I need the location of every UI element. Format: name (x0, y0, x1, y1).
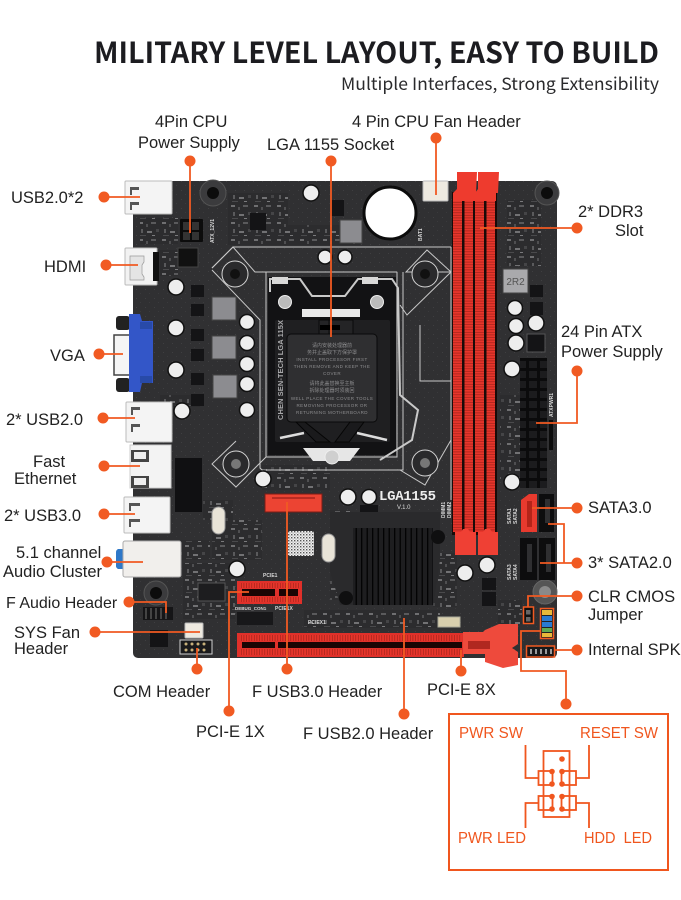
board silkscreen labels: SATA3 (507, 564, 513, 580)
leader: internal SPK (555, 644, 582, 656)
internal speaker header (526, 646, 554, 657)
label: HDMI: HDMI (44, 258, 86, 276)
label: 2* DDR3 Slot: 2* DDR3 (578, 203, 643, 221)
leader: F audio header (124, 596, 166, 613)
PCI-E 8X slot (237, 624, 518, 668)
large PHY chip (175, 458, 202, 512)
cover text: 请将此盖替换至主板 (309, 380, 355, 387)
F audio header (143, 607, 173, 620)
leader: audio cluster (102, 556, 143, 568)
leader: CPU power (184, 156, 196, 233)
board silkscreen labels: DEBUG_CON1 (235, 606, 267, 611)
PCI-E 1X slot (237, 581, 302, 604)
cover text: 务并止盖取下方保护罩 (307, 349, 357, 356)
board silkscreen labels: SATA1 (507, 508, 513, 524)
VGA port (114, 314, 153, 392)
CPU mounting holes (222, 261, 438, 477)
protective cover (287, 334, 377, 422)
leader: PCI-E 8X (456, 650, 466, 676)
label: CLR CMOS Jumper: CLR CMOS (588, 588, 675, 606)
cover text: 请内安装处理器前 (312, 342, 352, 349)
SATA2.0 connectors (520, 494, 555, 580)
PCI-E latch (463, 624, 518, 668)
CMOS battery (364, 187, 416, 239)
front panel header (540, 608, 554, 638)
leader: DDR3 (480, 222, 582, 234)
leader: front panel to pinout (521, 631, 572, 710)
leader: Ethernet (98, 460, 140, 472)
F USB3.0 header (265, 494, 322, 512)
subtitle: Multiple Interfaces, Strong Extensibility (341, 70, 659, 95)
label: F USB3.0 Header: F USB3.0 Header (252, 683, 383, 701)
label: SATA3.0: SATA3.0 (588, 499, 652, 517)
COM header (180, 640, 212, 654)
leader: COM header (192, 648, 202, 674)
label: PWR SW: PWR SW (459, 725, 524, 742)
board silkscreen labels: ATX_12V1 (210, 219, 216, 243)
audio cluster (116, 541, 181, 577)
label: 2* USB3.0: 2* USB3.0 (4, 507, 81, 525)
leader: SYS fan header (90, 626, 200, 638)
label: Internal SPK: Internal SPK (588, 641, 681, 659)
board silkscreen labels: PCIE1 (263, 573, 278, 579)
DIMM2 rails (475, 196, 484, 532)
leader: ATX power (536, 366, 582, 423)
label: PCI-E 8X: PCI-E 8X (427, 681, 496, 699)
DDR3 slots (452, 172, 499, 555)
DDR3 bottom latches (455, 529, 476, 555)
USB 2.0 rear port (126, 402, 172, 442)
leader: SATA3.0 (532, 502, 582, 514)
label: SYS Fan Header: Header (14, 640, 69, 658)
CLR CMOS jumper (524, 607, 534, 624)
DDR3 top latches (453, 172, 477, 201)
leader: F USB2.0 header (398, 618, 410, 720)
cover text: RETURNING MOTHERBOARD (296, 410, 368, 415)
label: 2* USB2.0: 2* USB2.0 (6, 411, 83, 429)
Ethernet port (130, 445, 171, 488)
leader: rear USB2.0 (98, 412, 135, 424)
socket screws (278, 296, 292, 308)
label: PCI-E 1X: PCI-E 1X (196, 723, 265, 741)
leader: SATA2.0 (540, 524, 582, 568)
label: Fast Ethernet: Fast (33, 453, 65, 471)
leader: CLR CMOS (528, 590, 582, 607)
label: VGA: VGA (50, 347, 85, 365)
load plate (275, 320, 390, 442)
inductors (212, 220, 362, 398)
board silkscreen labels: DIMM1 (441, 502, 447, 518)
CPU area silkscreen outline (212, 247, 451, 500)
board silkscreen labels: PCIE1X (275, 606, 293, 612)
label: 4Pin CPU Power Supply: 4Pin CPU (155, 113, 227, 131)
leader: USB2.0*2 (98, 192, 140, 202)
cover text (291, 342, 373, 415)
cover text: COVER (323, 371, 341, 376)
label: CLR CMOS Jumper: Jumper (588, 606, 644, 624)
socket body (268, 277, 396, 455)
board silkscreen labels: ATXPWR1 (549, 393, 555, 417)
label: COM Header: COM Header (113, 683, 211, 701)
surface-mount component areas (140, 193, 541, 628)
label: 5.1 channel Audio Cluster: 5.1 channel (16, 544, 101, 562)
label: F USB2.0 Header: F USB2.0 Header (303, 725, 434, 743)
label: 4Pin CPU Power Supply: Power Supply (138, 134, 241, 152)
board base (133, 181, 557, 658)
label: 3* SATA2.0: 3* SATA2.0 (588, 554, 672, 572)
board standoffs (144, 180, 559, 605)
board silkscreen labels: LGA1155 (379, 489, 436, 505)
board silkscreen labels: DIMM2 (447, 502, 453, 518)
debug header (237, 612, 273, 625)
cover text: WELL PLACE THE COVER TOOLS (291, 396, 373, 401)
electrolytic capacitors (168, 185, 544, 581)
label: 4 Pin CPU Fan Header: 4 Pin CPU Fan Header (352, 113, 521, 131)
inductor 2R2: 2R2 (506, 277, 525, 288)
label: 5.1 channel Audio Cluster: Audio Cluster (3, 563, 103, 581)
label: RESET SW: RESET SW (580, 725, 659, 742)
cover tabs (319, 320, 353, 334)
cover text: THEN REMOVE AND KEEP THE (294, 364, 370, 369)
inductor 2R2 (503, 269, 528, 293)
VRM MOSFETs (150, 200, 543, 647)
leader: F USB3.0 header (282, 502, 292, 674)
label: F Audio Header: F Audio Header (6, 595, 118, 612)
leader: socket (326, 156, 336, 337)
crystals and QR sticker (212, 507, 460, 627)
SYS fan header (185, 623, 203, 638)
board silkscreen labels: V.1.0 (397, 505, 411, 511)
metal retention lever (270, 279, 418, 460)
label: 24 Pin ATX Power Supply: 24 Pin ATX (561, 323, 642, 341)
4 pin CPU power connector (180, 219, 203, 242)
USB 3.0 port (124, 497, 170, 533)
title: MILITARY LEVEL LAYOUT, EASY TO BUILD (94, 30, 659, 72)
cover text: 拆除处理器时须装回 (309, 387, 355, 394)
HDMI port (125, 248, 159, 285)
label: PWR LED: PWR LED (458, 830, 526, 847)
board silkscreen labels: SATA2 (513, 508, 519, 524)
leader: VGA (94, 348, 123, 360)
board silkscreen labels (210, 219, 555, 626)
label: LGA 1155 Socket: LGA 1155 Socket (267, 136, 395, 154)
cover text: REMOVING PROCESSOR OR (297, 403, 368, 408)
socket maker mark: CHEN SEN-TECH LGA 115X (276, 320, 285, 420)
board silkscreen labels: BAT1 (418, 228, 424, 241)
label: 2* DDR3 Slot: Slot (615, 222, 644, 240)
CPU socket LGA 1155 (268, 277, 418, 464)
bottom clamp (303, 448, 360, 461)
label: Fast Ethernet: Ethernet (14, 470, 77, 488)
24 pin ATX power connector (520, 358, 553, 488)
DIMM1 rails (453, 196, 462, 532)
cover text: INSTALL PROCESSOR FIRST (296, 357, 368, 362)
label: SYS Fan Header: SYS Fan (14, 624, 80, 642)
motherboard (114, 172, 559, 668)
leader: CPU fan (430, 132, 442, 195)
pin header diagram (526, 745, 589, 828)
chipset heatsink (330, 512, 445, 605)
panel: front panel pinout (449, 714, 668, 870)
leader: USB3.0 (98, 508, 135, 520)
USB 2.0 x2 top port (125, 181, 172, 214)
panel border (449, 714, 668, 870)
label: HDD LED: HDD LED (584, 830, 652, 847)
SATA3.0 red connector (521, 494, 537, 532)
leader: PCI-E 1X (224, 592, 249, 716)
small connector right (527, 334, 545, 352)
board silkscreen labels: PCIEX1 (308, 620, 326, 626)
socket opening stripe (302, 309, 360, 317)
label: 24 Pin ATX Power Supply: Power Supply (561, 343, 664, 361)
4 pin CPU fan header (423, 181, 448, 201)
small connector (178, 248, 198, 267)
board silkscreen labels: SATA4 (513, 564, 519, 580)
leader: HDMI (100, 260, 138, 270)
label: USB2.0*2: USB2.0*2 (11, 189, 83, 207)
